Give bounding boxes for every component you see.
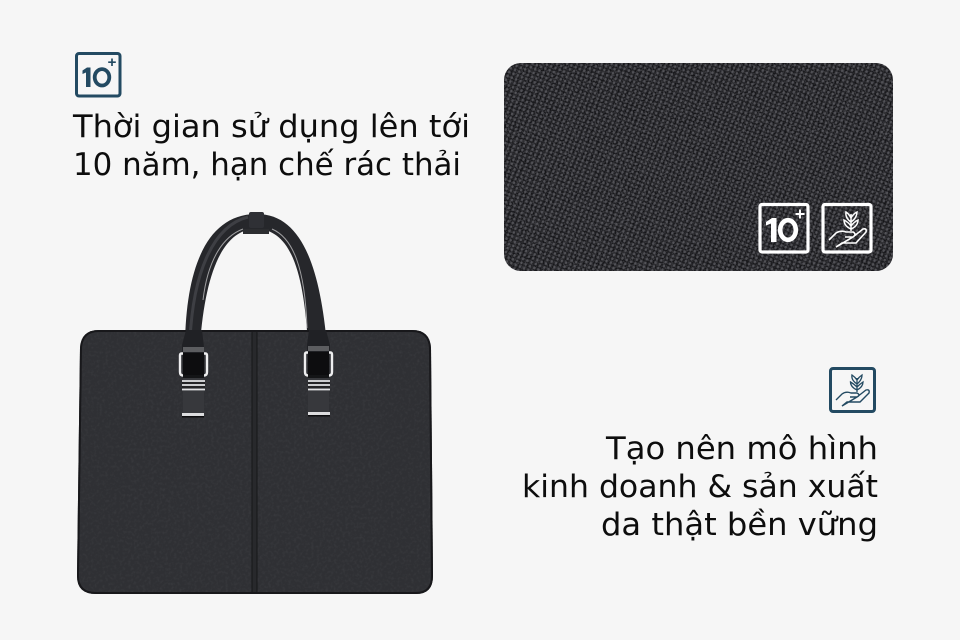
illustration: briefcase: [76, 212, 436, 595]
right buckle: [305, 330, 332, 416]
text block: sustainable model: [522, 431, 878, 543]
text block: lifespan: Thời gian sử dụng lên tới: [72, 109, 470, 145]
icon: ten plus badge white: [760, 204, 808, 252]
handle: [185, 212, 327, 345]
icon: plant in hand: [830, 368, 874, 412]
bag body: [76, 329, 436, 595]
icon: plant in hand badge white: [823, 204, 871, 252]
text block: sustainable model: da thật bền vững: [601, 507, 878, 543]
text block: lifespan: 10 năm, hạn chế rác thải: [73, 147, 461, 183]
icon: ten plus years: [76, 54, 120, 96]
left buckle: [180, 330, 207, 418]
text block: lifespan: [72, 109, 470, 183]
text block: sustainable model: kinh doanh & sản xuất: [522, 469, 878, 505]
text block: sustainable model: Tạo nên mô hình: [605, 431, 878, 467]
panel: leather swatch: [504, 63, 893, 271]
